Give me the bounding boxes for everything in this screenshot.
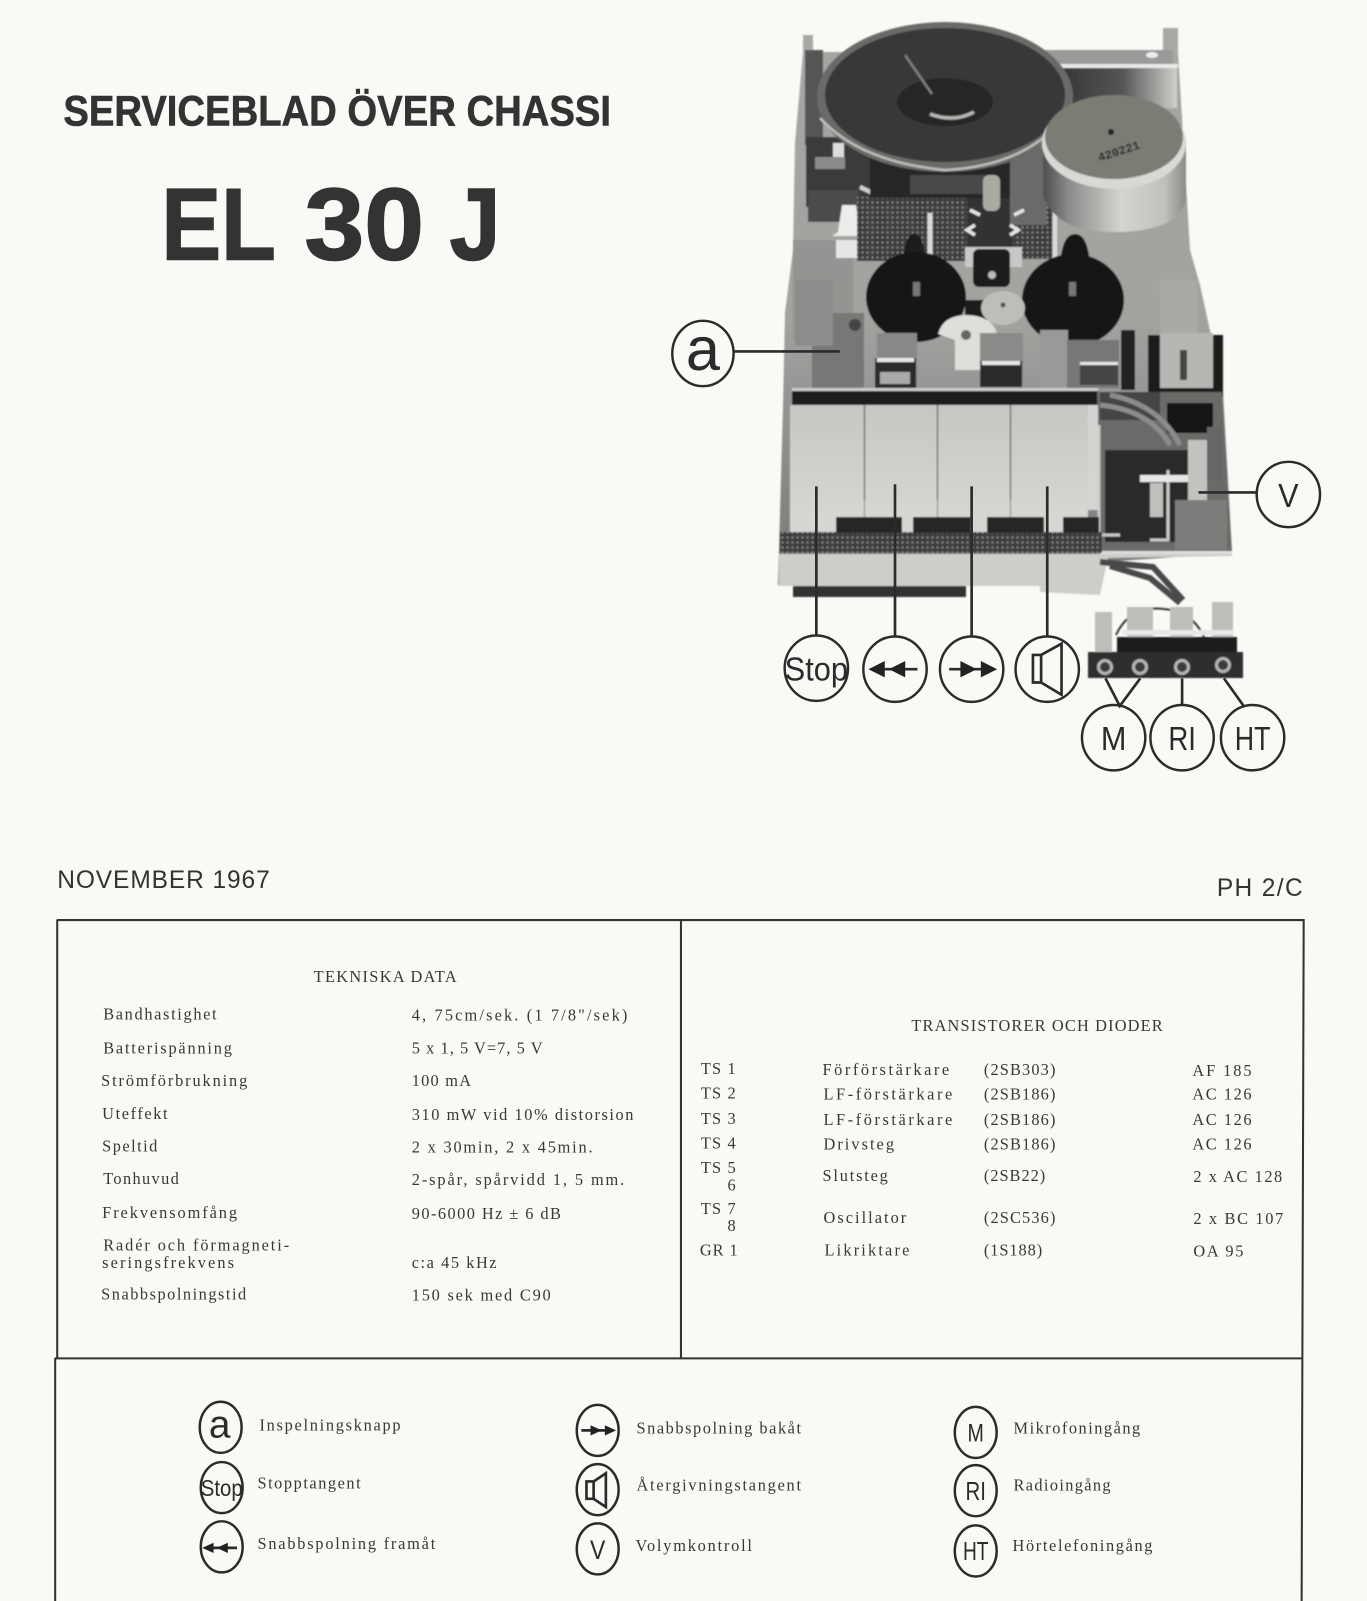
document code: PH 2/C [1217,875,1303,902]
heading: transistors and diodes: TRANSISTORER OCH DIODER [911,1016,1163,1035]
center switch block [980,333,1023,388]
row: erase and bias frequency: c:a 45 kHz [412,1253,497,1272]
top bracket [1043,50,1178,108]
legend: stop key: Stop [201,1475,243,1501]
row: TS 1: Förförstärkare [822,1060,949,1079]
component blocks [795,280,1135,390]
speaker cone [825,28,1065,162]
legend: microphone input [955,1407,1140,1458]
left side wiring area [805,50,937,222]
row: TS 4: Drivsteg [823,1134,894,1153]
socket [967,175,1024,235]
legend: record button [200,1402,401,1453]
callout fast forward [863,484,927,702]
pinch roller bracket [938,315,997,370]
legend: microphone input: M [968,1421,984,1448]
heading: service sheet title: SERVICEBLAD ÖVER CHASSI [63,88,611,136]
callout Stop: Stop [785,650,848,688]
row: erase and bias frequency [102,1236,497,1272]
row: TS 7 and 8: 8 [727,1216,736,1235]
legend: rewind [577,1405,801,1456]
row: TS 7 and 8: 2 x BC 107 [1193,1209,1283,1228]
row: frequency range: 90-6000 Hz ± 6 dB [412,1204,561,1223]
panel: symbol legend [200,1402,1152,1576]
callout playback speaker [1016,486,1079,702]
row: power consumption: Strömförbrukning [101,1071,247,1090]
row: power consumption [101,1071,471,1090]
legend: playback key: Återgivningstangent [637,1476,801,1495]
row: TS 4: (2SB186) [984,1134,1055,1153]
date: NOVEMBER 1967 [57,867,270,894]
row: TS 3: (2SB186) [984,1110,1055,1129]
legend: radio input [955,1465,1111,1516]
callout M: microphone [1082,678,1145,770]
row: power consumption: 100 mA [412,1071,471,1090]
callout M: microphone: M [1101,720,1126,758]
callout V: volume control [1198,462,1320,527]
dark block under speaker [870,147,1047,225]
row: TS 1 [701,1059,1252,1080]
row: erase and bias frequency: seringsfrekvens [102,1253,234,1272]
legend: fast forward [201,1521,436,1572]
side strip [1160,280,1197,335]
legend: record button: a [209,1404,231,1447]
row: tape speed: Bandhastighet [103,1005,217,1024]
row: TS 2: (2SB186) [984,1084,1055,1103]
head bracket [965,247,1022,287]
panel: transistors and diodes [700,1016,1283,1261]
front bar [779,554,1232,597]
tape reel left [866,234,966,342]
legend: volume control: V [590,1535,606,1565]
guide pins [930,213,1055,258]
row: output power: Uteffekt [102,1104,168,1123]
heading: model name: EL [161,168,276,282]
dark key rail [792,388,1098,405]
row: TS 1: AF 185 [1192,1061,1252,1080]
legend: playback key [577,1464,801,1515]
row: TS 7 and 8: TS 7 [701,1199,736,1218]
callout rewind [940,486,1003,702]
input connector [1088,602,1243,678]
row: fast winding time: Snabbspolningstid [101,1285,246,1304]
row: TS 3: AC 126 [1192,1110,1252,1129]
row: TS 4 [701,1133,1252,1153]
lower left plate [793,240,853,340]
row: TS 4: TS 4 [701,1133,736,1152]
row: battery voltage: Batterispänning [103,1038,232,1057]
row: TS 2: LF-förstärkare [823,1084,952,1103]
legend: headphone input [955,1525,1152,1576]
chassis plate [778,52,1232,585]
row: TS 7 and 8 [701,1199,1283,1235]
right switch block [1067,340,1119,388]
wire bundle [1100,562,1183,603]
row: tape head [103,1169,624,1189]
row: TS 2: TS 2 [701,1083,736,1102]
legend: radio input: RI [966,1478,986,1506]
capacitor can [1042,95,1186,232]
row: TS 7 and 8: Oscillator [823,1208,907,1227]
level meter [1148,333,1223,397]
row: fast winding time [101,1285,551,1305]
capstan disc [965,291,1025,325]
row: battery voltage [103,1038,543,1057]
row: TS 5 and 6: 6 [727,1175,736,1194]
callout HT: headphones: HT [1235,720,1270,758]
row: TS 1: (2SB303) [984,1060,1055,1079]
legend: headphone input: HT [963,1538,989,1566]
mounting posts [803,28,1178,77]
row: playing time: 2 x 30min, 2 x 45min. [412,1137,593,1156]
speaker rim [817,22,1073,172]
legend: volume control: Volymkontroll [635,1536,752,1555]
row: GR 1: OA 95 [1193,1242,1243,1261]
row: output power [102,1104,633,1124]
electronics board [1097,392,1232,556]
callout RI: radio: RI [1168,720,1196,758]
heading: technical data: TEKNISKA DATA [314,967,457,986]
row: tape head: Tonhuvud [103,1169,179,1188]
callout HT: headphones [1221,678,1284,770]
callout V: volume control: V [1278,477,1299,515]
row: erase and bias frequency: Radér och förmagneti- [103,1236,289,1255]
heading: model name: J [450,168,501,282]
piano keys [790,405,1098,517]
row: TS 5 and 6: TS 5 [701,1158,736,1177]
row: TS 3 [701,1109,1252,1129]
photo: tape recorder chassis [778,22,1243,678]
left switch block [877,333,917,388]
legend: rewind: Snabbspolning bakåt [637,1418,801,1437]
legend: record button: Inspelningsknapp [260,1415,401,1434]
row: frequency range: Frekvensomfång [102,1203,237,1222]
row: TS 7 and 8: (2SC536) [984,1208,1055,1227]
speaker center [897,78,993,126]
perforated board [857,197,1058,261]
row: battery voltage: 5 x 1, 5 V=7, 5 V [412,1038,543,1057]
loop wire [1116,609,1204,637]
row: TS 3: LF-förstärkare [823,1110,952,1129]
row: TS 5 and 6 [701,1158,1282,1194]
callout a: record button [672,315,840,386]
row: fast winding time: 150 sek med C90 [412,1286,551,1305]
legend: microphone input: Mikrofoningång [1014,1418,1140,1437]
legend: stop key [201,1462,361,1513]
key base band [780,517,1102,553]
callout Stop [785,486,848,701]
row: TS 5 and 6: 2 x AC 128 [1193,1167,1282,1186]
row: frequency range [102,1203,561,1223]
heading: model name [161,168,501,282]
row: TS 5 and 6: (2SB22) [984,1166,1045,1185]
row: TS 3: TS 3 [701,1109,736,1128]
white pillar [832,205,868,258]
row: GR 1: Likriktare [825,1241,909,1260]
legend: stop key: Stopptangent [257,1474,361,1493]
legend: headphone input: Hörtelefoningång [1013,1536,1152,1555]
row: GR 1: (1S188) [984,1241,1042,1260]
row: TS 5 and 6: Slutsteg [822,1166,888,1185]
row: playing time [102,1136,593,1156]
capacitor can: 420221 [1096,139,1142,165]
record button block [812,313,864,388]
row: TS 4: AC 126 [1192,1134,1252,1153]
row: TS 2: AC 126 [1192,1084,1252,1103]
callout a: record button: a [686,315,721,383]
panel: technical data [101,967,633,1305]
row: tape speed [103,1005,627,1025]
heading: model name: 30 [304,168,424,282]
row: tape speed: 4, 75cm/sek. (1 7/8"/sek) [412,1006,627,1025]
row: TS 1: TS 1 [701,1059,736,1078]
row: tape head: 2-spår, spårvidd 1, 5 mm. [412,1170,624,1189]
legend: volume control [577,1523,752,1574]
speaker [817,22,1073,172]
row: TS 2 [701,1083,1252,1103]
callout RI: radio [1150,678,1214,770]
tape reel right [1022,234,1124,346]
legend: fast forward: Snabbspolning framåt [257,1534,436,1553]
row: GR 1: GR 1 [700,1241,738,1260]
legend: radio input: Radioingång [1014,1476,1111,1495]
row: playing time: Speltid [102,1136,157,1155]
table frame [55,920,1304,1601]
row: output power: 310 mW vid 10% distorsion [412,1105,633,1124]
row: GR 1 [700,1241,1243,1261]
